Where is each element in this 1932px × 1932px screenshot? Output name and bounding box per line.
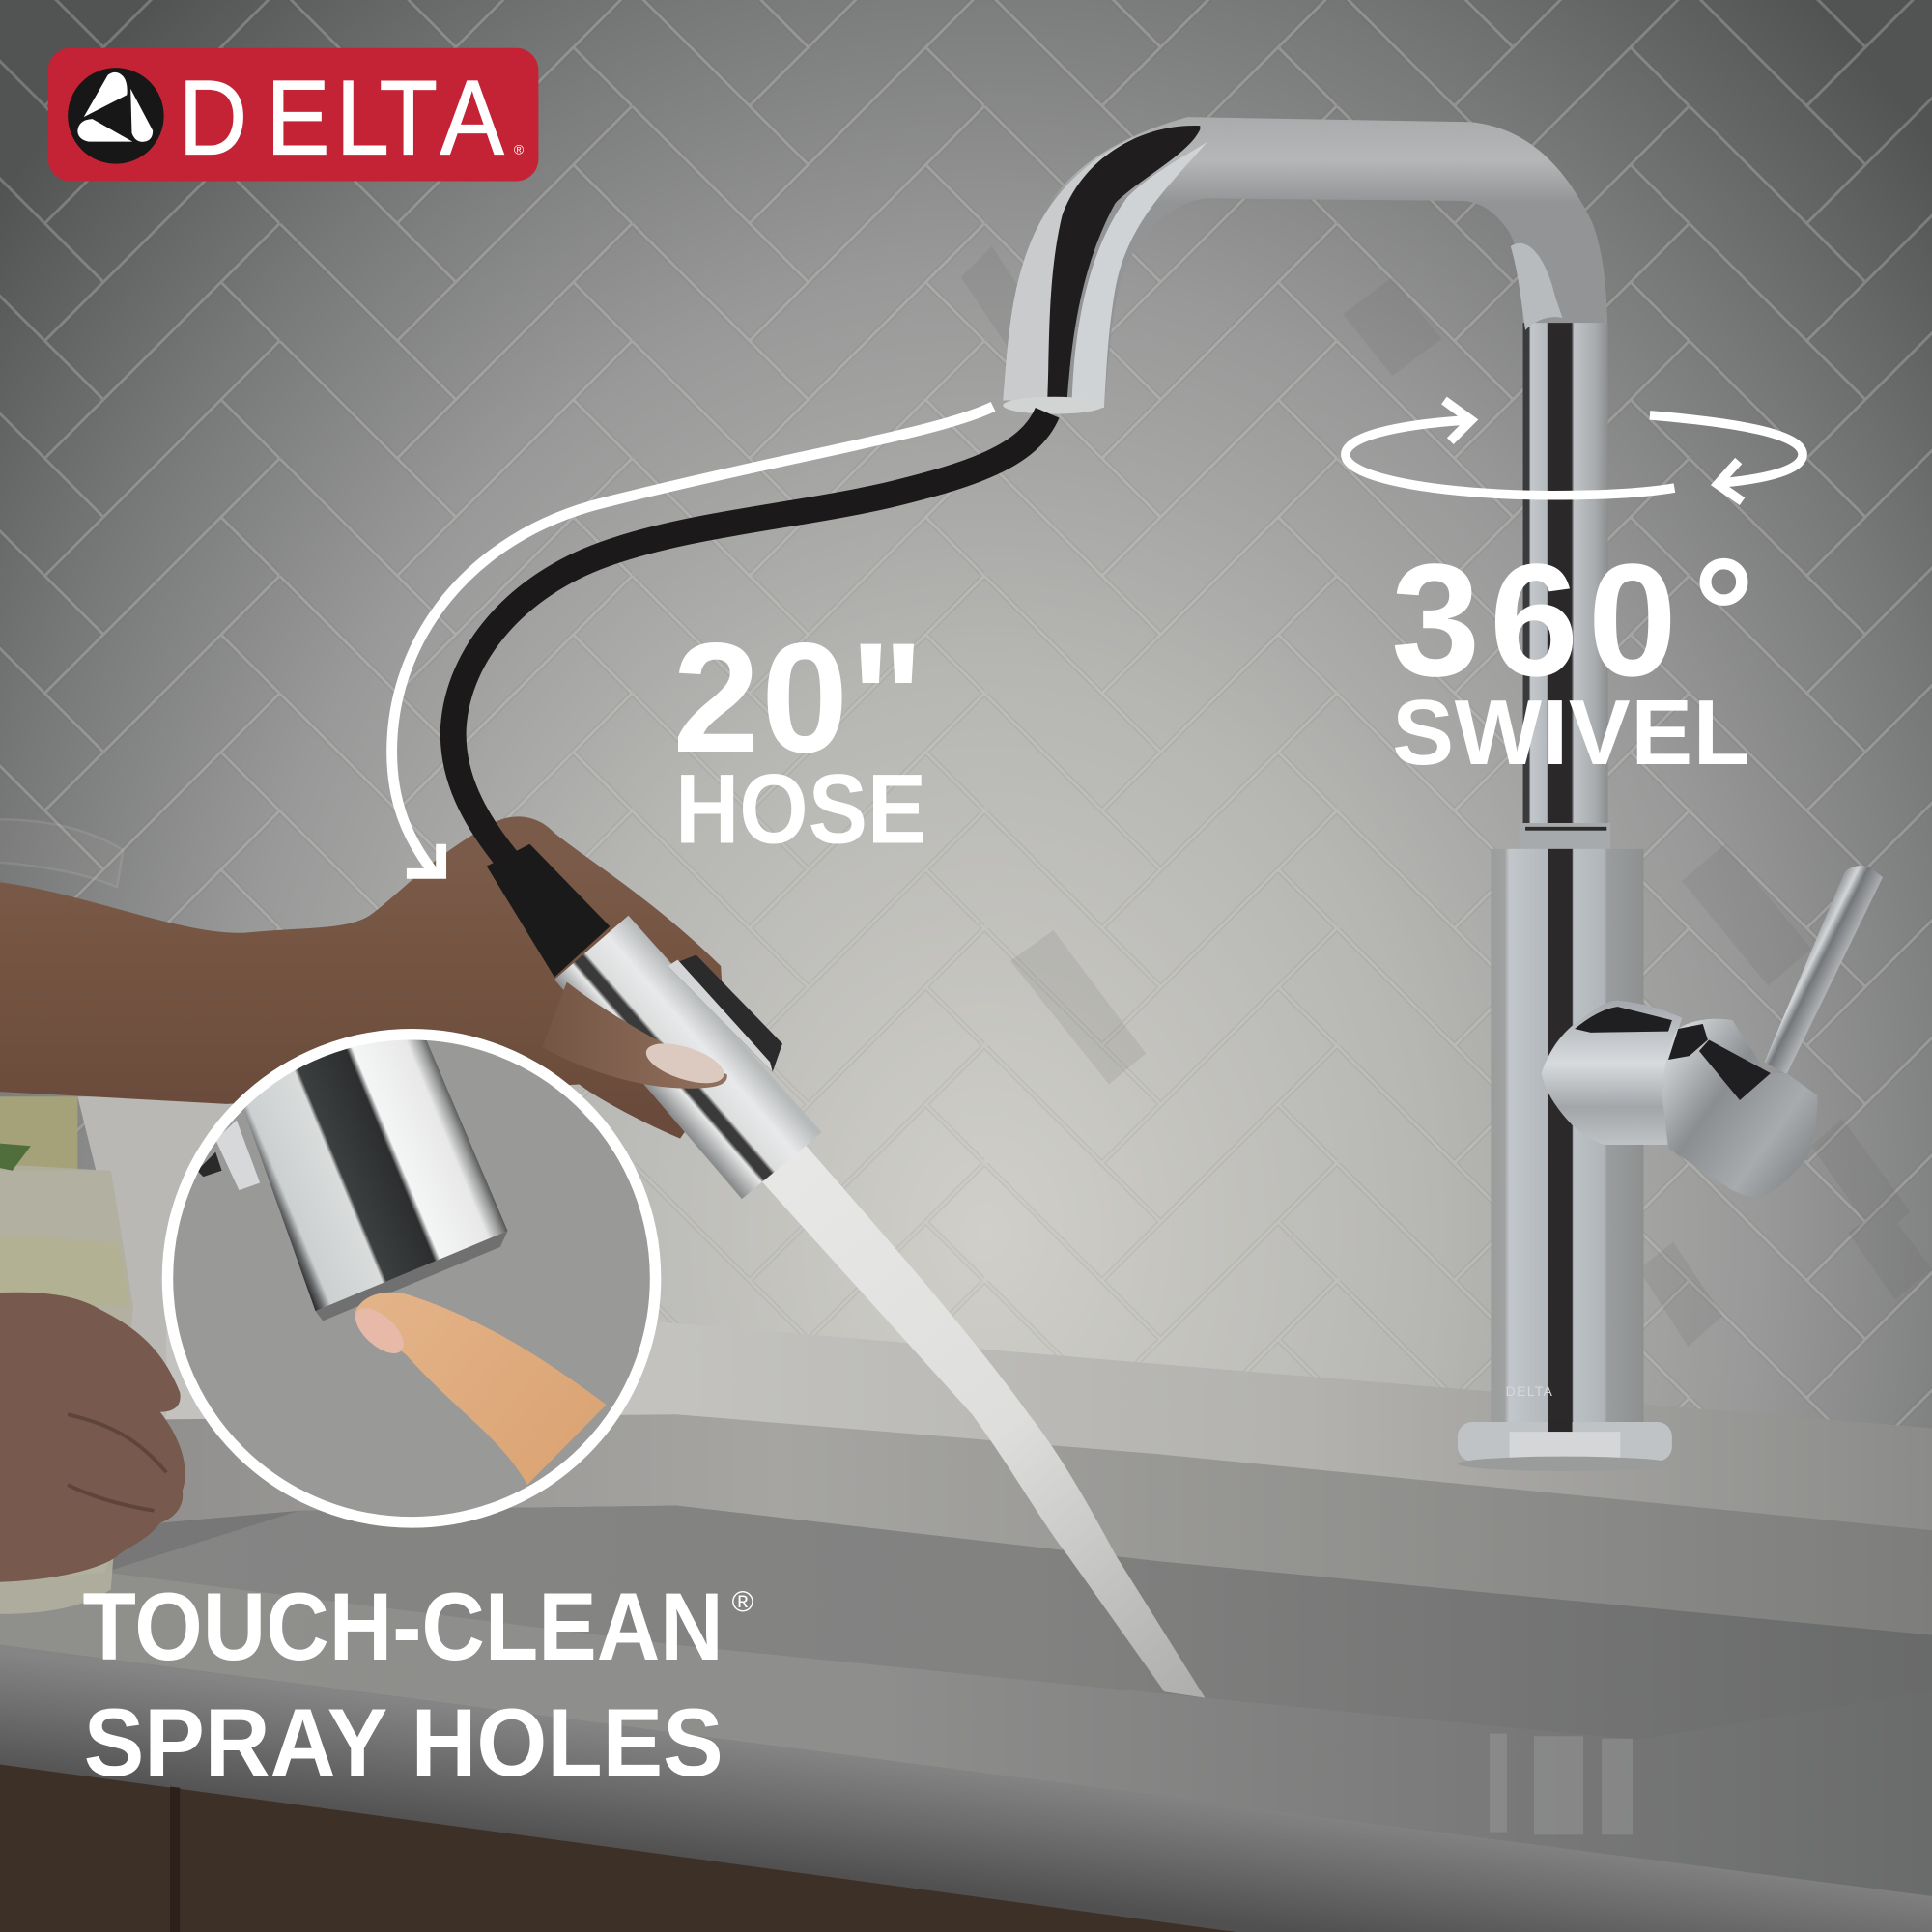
thumb nail — [641, 1036, 728, 1092]
pulling hand and forearm — [0, 816, 727, 1139]
wood cabinet — [0, 1765, 1237, 1932]
spout — [1003, 117, 1608, 838]
counter front edge — [0, 1645, 1932, 1932]
back counter surface — [127, 1274, 1932, 1534]
label: 20 inch hose — [672, 611, 926, 864]
tiled backsplash wall — [0, 0, 1932, 1479]
sink basin — [104, 1506, 1932, 1740]
supporting hand — [0, 1293, 185, 1582]
brand wordmark: DELTA — [179, 60, 504, 178]
thumb — [542, 982, 728, 1092]
label: touch-clean spray holes — [82, 1574, 754, 1797]
label: 360 degree swivel: 360 — [1391, 531, 1677, 710]
hose length arrow — [392, 407, 993, 873]
detail lens: touch-clean spray face — [167, 1035, 656, 1522]
finger nail — [355, 1308, 404, 1353]
finger touching spray holes — [355, 1293, 607, 1485]
label: 360 degree swivel — [1391, 526, 1754, 784]
label: 20 inch hose: 20" — [672, 611, 924, 785]
logo emblem — [68, 68, 164, 164]
spout dark reflection — [1047, 126, 1200, 401]
handle cap — [1662, 1019, 1817, 1198]
faucet reflection on rim — [1490, 1734, 1633, 1834]
hose connector — [487, 844, 610, 977]
collar — [1520, 823, 1610, 850]
button close-up — [215, 1120, 260, 1190]
swivel arrows — [1346, 401, 1803, 501]
riser column — [1523, 323, 1608, 838]
handle hub — [1542, 1001, 1682, 1145]
faucet — [1003, 117, 1883, 1471]
base body — [1491, 849, 1644, 1426]
base ring — [1458, 1419, 1672, 1471]
label: 20 inch hose: HOSE — [675, 753, 926, 864]
water stream — [754, 1140, 1205, 1698]
spray holes — [316, 1231, 508, 1321]
sprayer close-up — [244, 1035, 508, 1311]
label: touch-clean spray holes: TOUCH-CLEAN — [82, 1574, 724, 1681]
label: 360 degree swivel: ° — [1693, 526, 1754, 698]
spray button — [668, 955, 782, 1072]
counter front face — [160, 1414, 1932, 1635]
sprayer head — [554, 916, 822, 1199]
Delta logo badge — [48, 48, 538, 181]
label: touch-clean spray holes: ® — [732, 1585, 754, 1618]
lever handle — [1765, 866, 1883, 1074]
Delta logo badge: ® — [514, 141, 525, 156]
spout left highlight — [1003, 138, 1133, 401]
engraved brand on faucet: DELTA — [1506, 1383, 1553, 1399]
pull-down hose — [453, 412, 1047, 860]
label: 360 degree swivel: SWIVEL — [1392, 681, 1749, 784]
label: touch-clean spray holes: SPRAY HOLES — [84, 1690, 724, 1797]
sink rim — [0, 1573, 1932, 1896]
drinking glass with lemon water — [0, 819, 166, 1614]
spout nozzle rim — [1003, 397, 1104, 414]
